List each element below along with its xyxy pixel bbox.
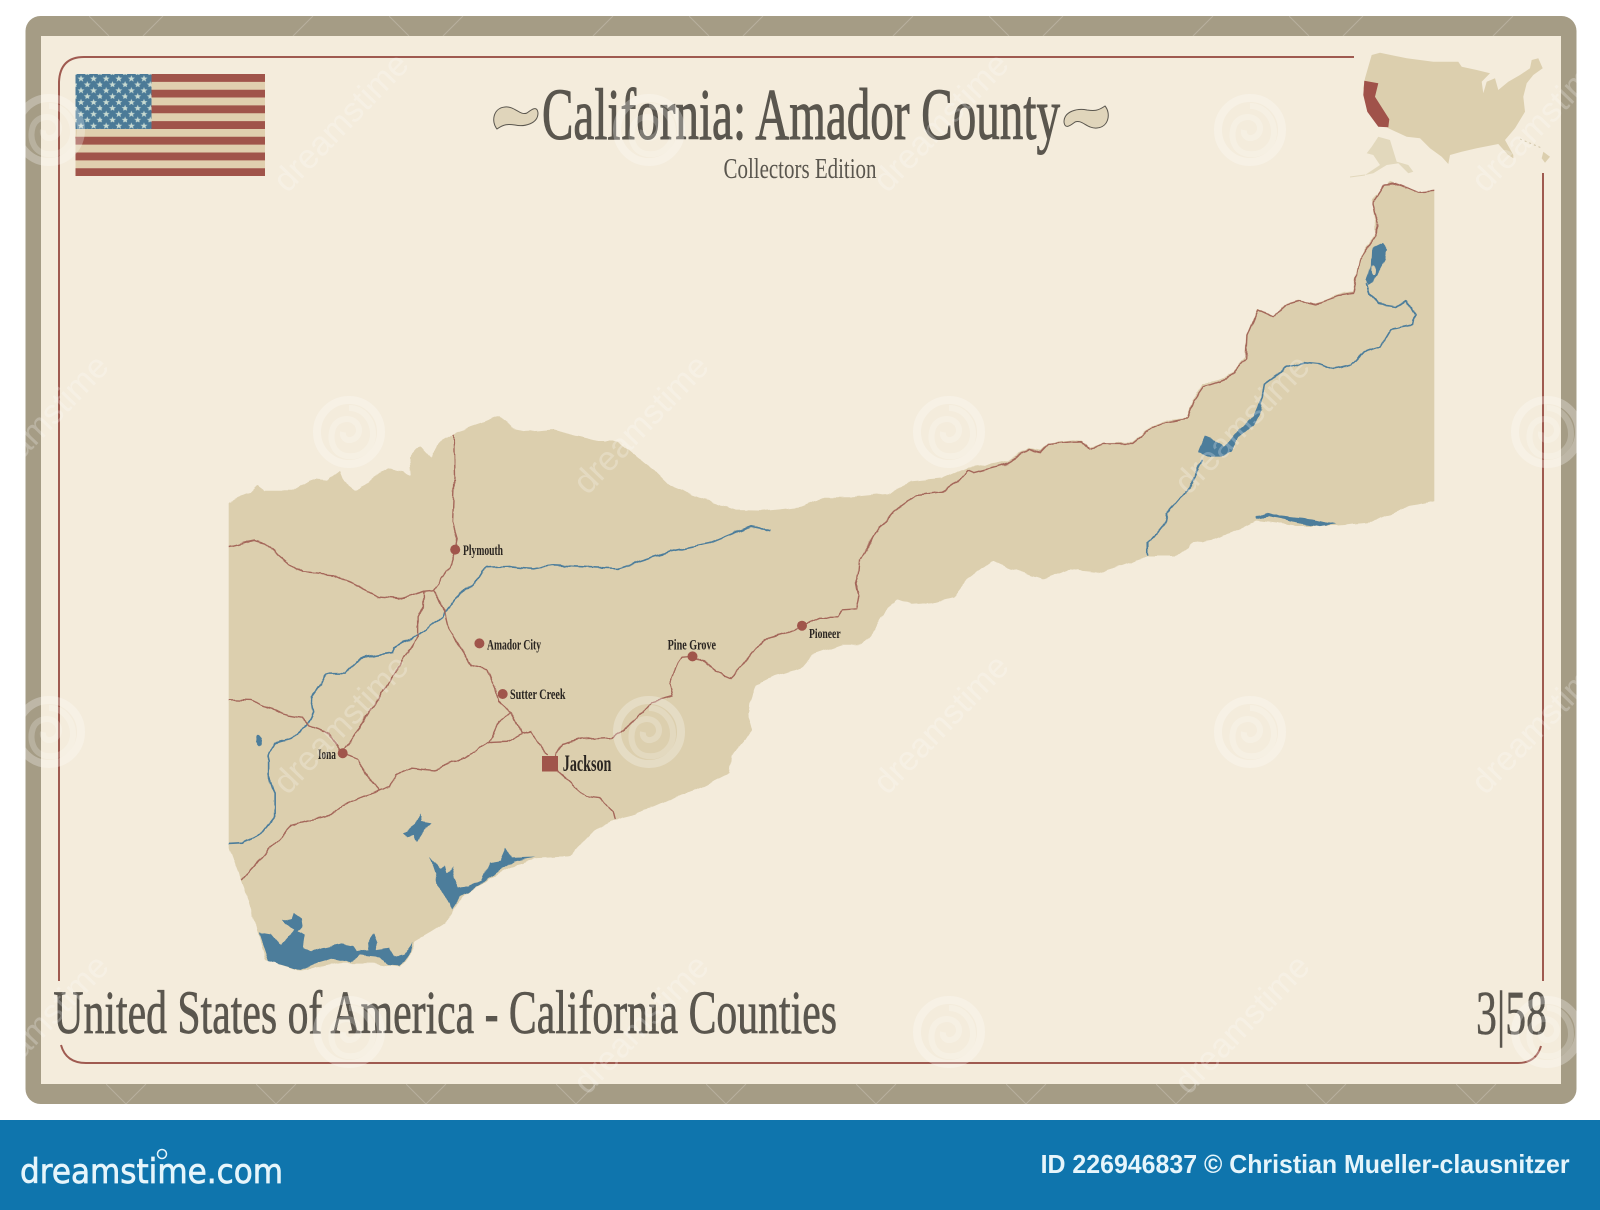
icon: American flag <box>76 74 265 176</box>
image credit: ID 226946837 © Christian Mueller-clausnitzer <box>1041 1149 1570 1179</box>
city: Amador City: Amador City <box>487 638 541 654</box>
icon: right title flourish <box>1064 106 1108 128</box>
map: Amador County <box>220 183 1445 970</box>
title: California: Amador County <box>542 74 1060 155</box>
watermark overlay: dreamstime <box>866 647 1016 801</box>
logo: dreamstime.com: dreamstime.com <box>20 1152 283 1192</box>
watermark overlay: dreamstime <box>566 347 716 501</box>
city: Iona: Iona <box>318 747 336 763</box>
page number: 3|58 <box>1476 980 1547 1048</box>
watermark overlay: dreamstime <box>1167 347 1317 501</box>
county shape with lakes, rivers and roads <box>220 183 1445 970</box>
city: Jackson county seat <box>542 751 612 776</box>
icon: left title flourish <box>494 107 538 129</box>
city: Pine Grove: Pine Grove <box>668 638 716 654</box>
subtitle: Collectors Edition <box>724 154 876 185</box>
footer bar <box>0 1120 1600 1210</box>
icon: USA locator map <box>1350 53 1550 177</box>
city: Plymouth <box>450 543 503 559</box>
city: Plymouth: Plymouth <box>463 543 503 559</box>
city: Pine Grove <box>668 638 716 661</box>
watermark overlay: dreamstime <box>266 45 416 199</box>
city: Pioneer: Pioneer <box>809 627 841 642</box>
city: Pioneer <box>797 621 841 642</box>
city: Sutter Creek: Sutter Creek <box>510 687 566 703</box>
city: Sutter Creek <box>498 687 566 703</box>
watermark overlay: dreamstime <box>266 647 416 801</box>
footer heading: United States of America - California Counties <box>53 980 837 1047</box>
watermark overlay: dreamstime <box>566 947 716 1101</box>
watermark overlay: dreamstime <box>866 45 1016 199</box>
watermark overlay: dreamstime <box>1167 947 1317 1101</box>
city: Jackson county seat: Jackson <box>563 751 612 776</box>
city: Amador City <box>474 638 541 654</box>
